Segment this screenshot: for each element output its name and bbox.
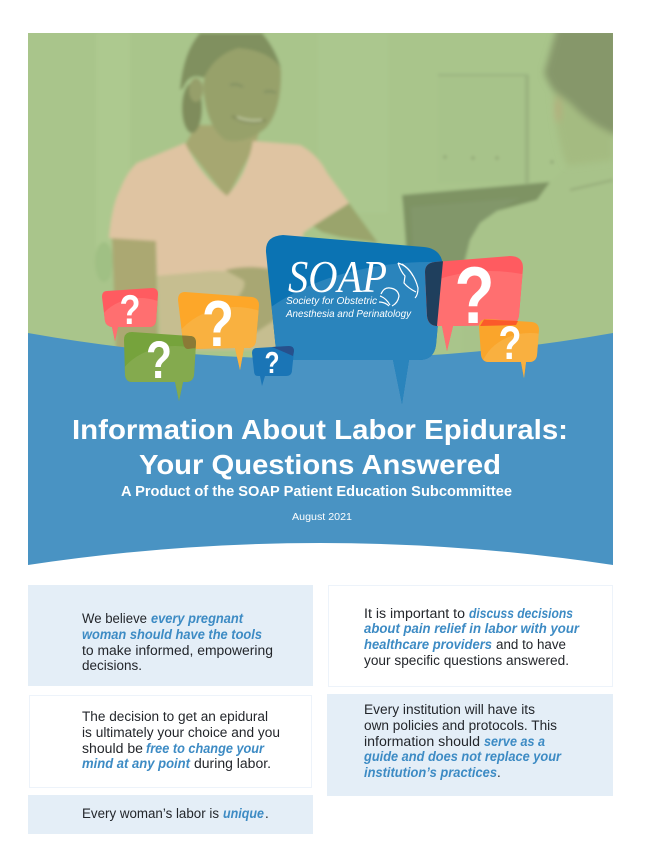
logo icon: mother and baby bbox=[379, 263, 418, 306]
text: policies statement: serve as a bbox=[484, 734, 545, 749]
neck and chest bbox=[185, 125, 262, 198]
text: discuss statement: your specific questions answered. bbox=[364, 653, 569, 668]
text: tools statement bbox=[82, 611, 273, 673]
text: discuss statement: healthcare providers bbox=[364, 637, 492, 652]
text: choice statement: The decision to get an epidural bbox=[82, 709, 268, 724]
text: policies statement: information should bbox=[364, 734, 480, 749]
text: discuss statement: It is important to bbox=[364, 606, 465, 621]
text: unique statement: . bbox=[265, 806, 269, 821]
SOAP wordmark: SOAP bbox=[288, 251, 387, 302]
bubble: small orange right bbox=[479, 319, 539, 378]
title: Information About Labor Epidurals: bbox=[72, 414, 568, 445]
text: tools statement: woman should have the tools bbox=[82, 627, 262, 642]
laptop bbox=[401, 181, 550, 246]
subtitle: A Product of the SOAP Patient Education Subcommittee bbox=[121, 483, 512, 500]
bubble: green bbox=[124, 332, 196, 401]
photo: woman talking with a clinician, green tint bbox=[28, 33, 613, 358]
panel: institution policies bbox=[327, 694, 613, 796]
text: tools statement: decisions. bbox=[82, 658, 142, 673]
bubble: medium orange bbox=[178, 292, 259, 370]
facial features bbox=[230, 84, 276, 122]
woman's hair bbox=[180, 33, 281, 90]
date: August 2021 bbox=[292, 511, 352, 523]
text: choice statement: mind at any point bbox=[82, 756, 190, 771]
bubble: large red question bbox=[425, 256, 523, 351]
woman's face bbox=[203, 44, 281, 141]
text: tools statement: every pregnant bbox=[151, 611, 243, 626]
text: policies statement: guide and does not replace your bbox=[363, 749, 562, 764]
title: Your Questions Answered bbox=[139, 449, 501, 480]
society name: Society for Obstetric bbox=[286, 295, 378, 307]
clinician head bbox=[544, 28, 618, 166]
clinician shoulder bbox=[460, 158, 613, 400]
text: unique statement: unique bbox=[223, 806, 264, 821]
bubble: large red question: ? bbox=[454, 251, 494, 341]
text: policies statement: . bbox=[497, 765, 501, 780]
text: discuss statement: about pain relief in labor with your bbox=[364, 621, 580, 636]
bubble: green: ? bbox=[146, 331, 172, 390]
panel: every pregnant woman bbox=[28, 585, 313, 686]
text: discuss statement bbox=[364, 606, 580, 668]
text: policies statement: Every institution will have its bbox=[364, 702, 535, 717]
panel: unique labor bbox=[28, 795, 313, 834]
bubble: small red left bbox=[102, 288, 158, 341]
speech bubbles cluster bbox=[102, 235, 539, 404]
bubble: SOAP logo bbox=[266, 235, 442, 404]
blue title panel bbox=[28, 333, 613, 565]
bubble: medium orange: ? bbox=[202, 287, 234, 360]
text: tools statement: We believe bbox=[82, 611, 147, 626]
text: discuss statement: and to have bbox=[496, 637, 566, 652]
text: tools statement: to make informed, empowering bbox=[82, 643, 273, 658]
text: policies statement: own policies and protocols. This bbox=[364, 718, 557, 733]
panel: your choice bbox=[30, 696, 312, 788]
text: unique statement: Every woman’s labor is bbox=[82, 806, 219, 821]
panel: discuss decisions bbox=[328, 586, 612, 686]
text: choice statement: during labor. bbox=[194, 756, 271, 771]
text: choice statement bbox=[82, 709, 280, 771]
text: choice statement: should be bbox=[82, 741, 143, 756]
bubble: small orange right: ? bbox=[498, 316, 522, 369]
woman's ear bbox=[189, 78, 203, 102]
text: discuss statement: discuss decisions bbox=[469, 606, 573, 621]
text: choice statement: free to change your bbox=[146, 741, 265, 756]
bubble: small red left: ? bbox=[120, 286, 140, 333]
woman's far arm bbox=[112, 238, 158, 350]
bubble: small blue: ? bbox=[264, 345, 280, 380]
woman's back hair bbox=[182, 83, 202, 133]
bubble: small blue bbox=[252, 345, 294, 386]
title bbox=[72, 414, 568, 480]
woman's near arm bbox=[313, 203, 378, 243]
text: policies statement bbox=[363, 702, 562, 780]
woman's shirt bbox=[109, 141, 349, 276]
woman's belly bbox=[157, 271, 290, 350]
text: policies statement: institution’s practices bbox=[364, 765, 497, 780]
text: choice statement: is ultimately your choice and you bbox=[82, 725, 280, 740]
hand on belly bbox=[225, 267, 275, 333]
society name: Anesthesia and Perinatology bbox=[285, 308, 412, 320]
